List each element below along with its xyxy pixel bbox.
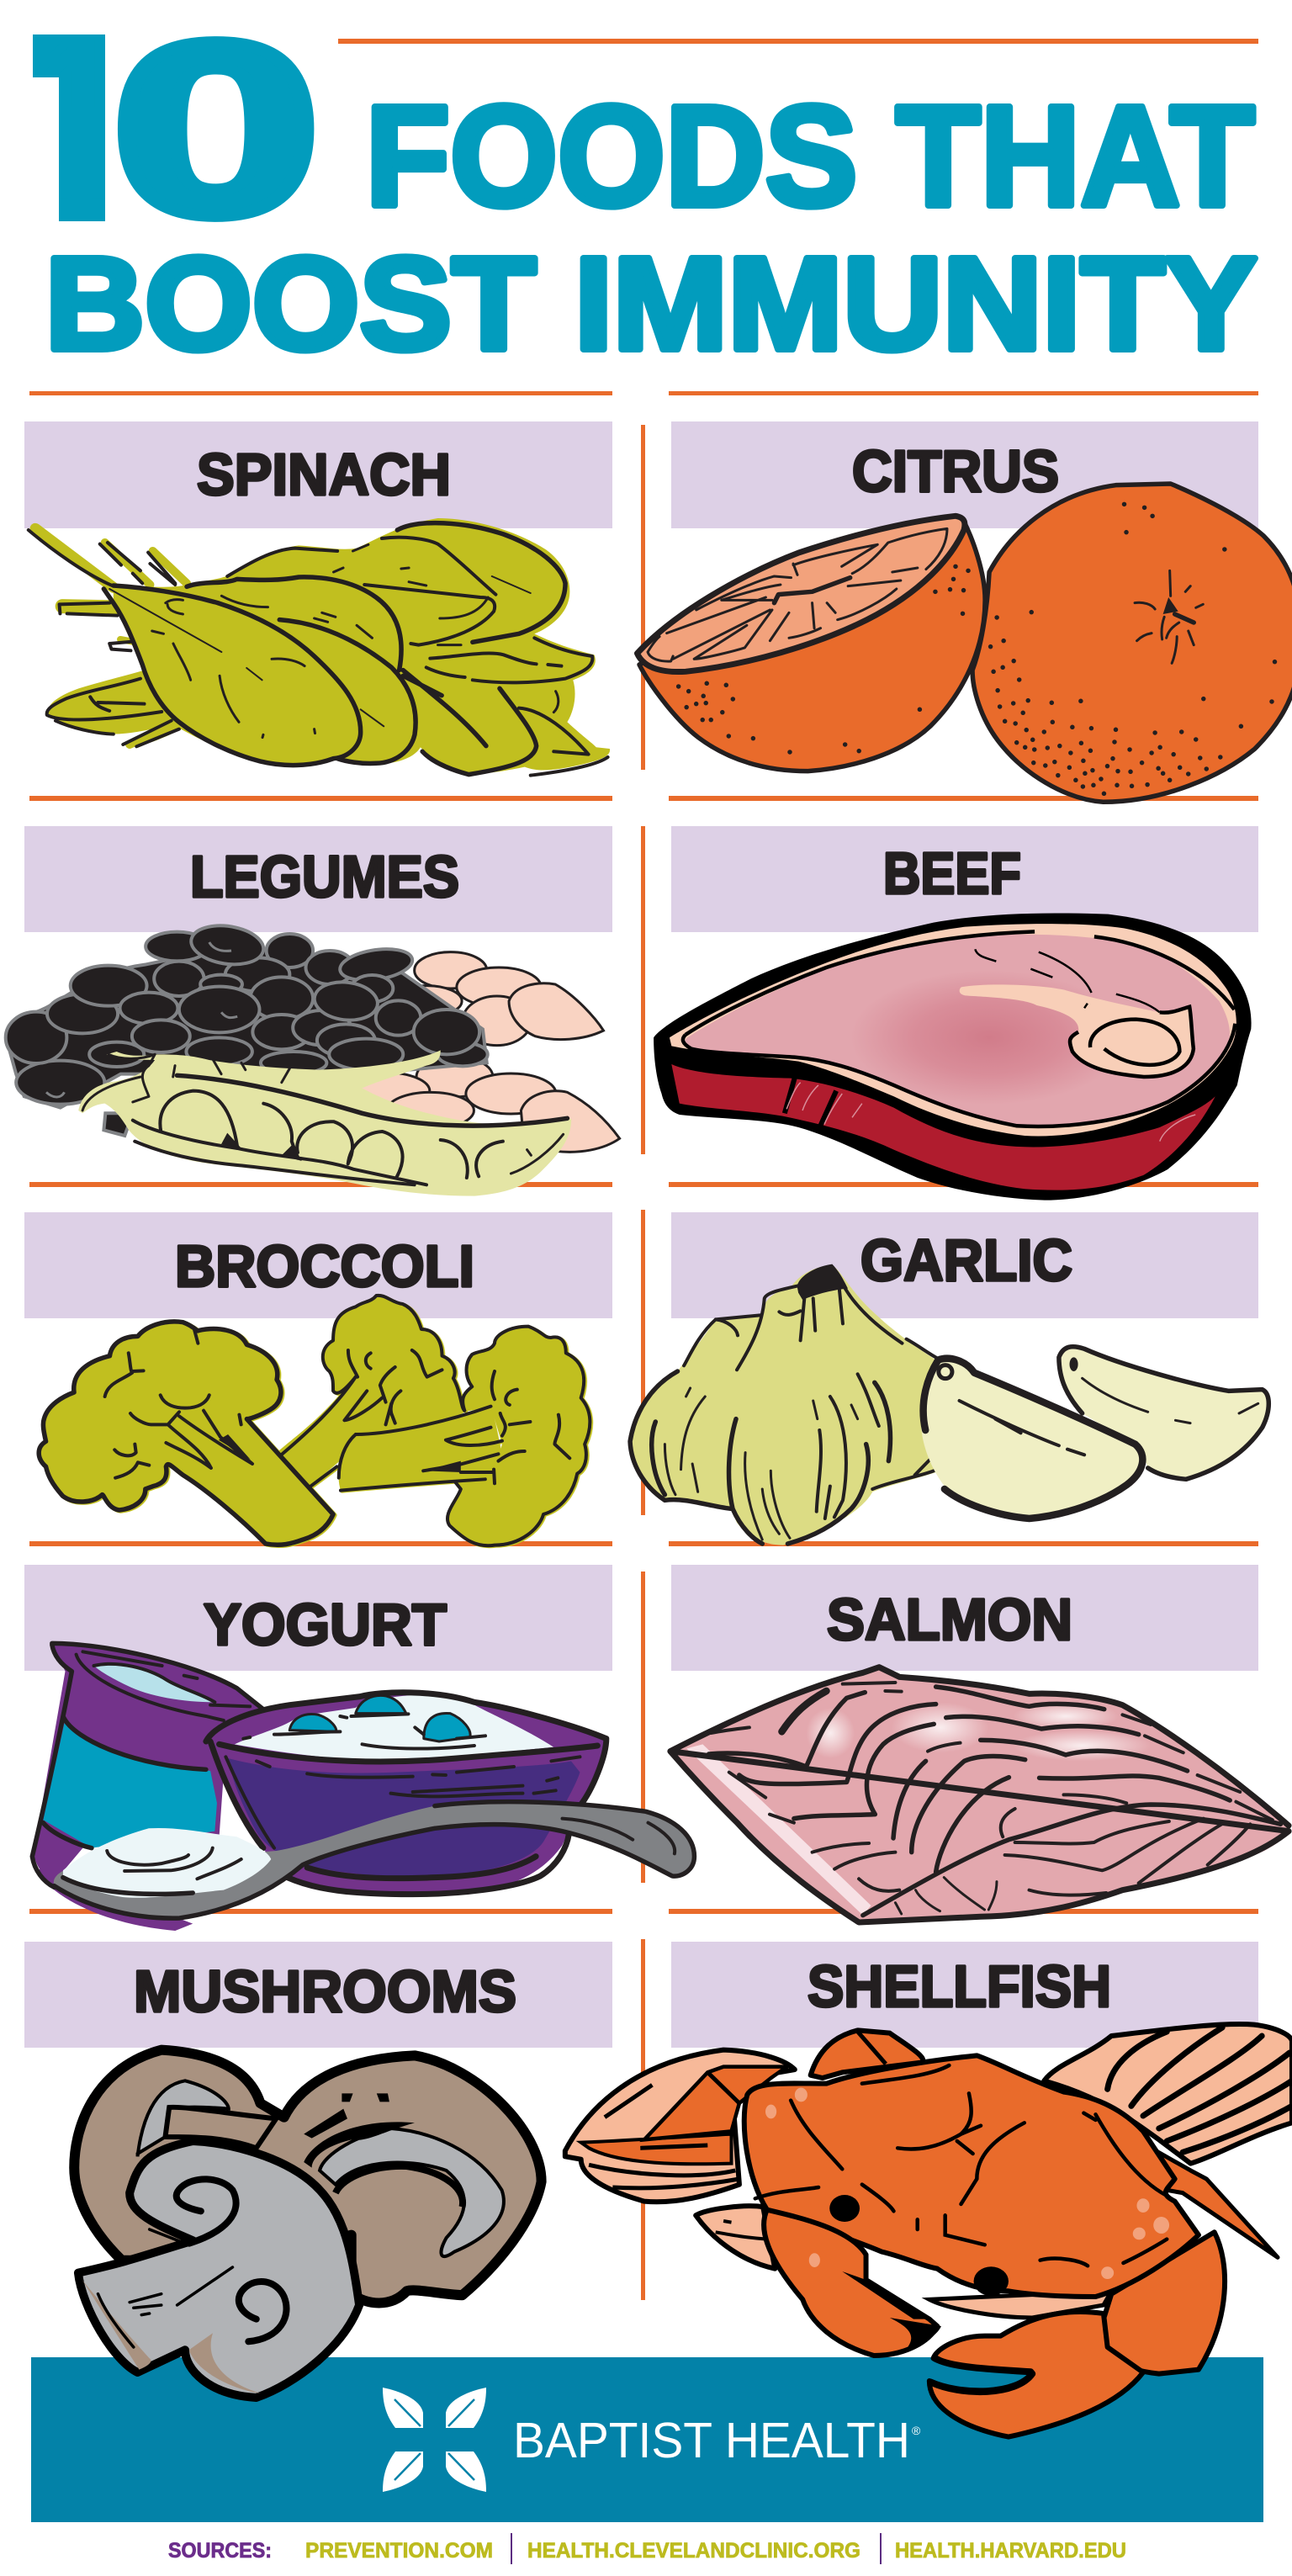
- sources line: HEALTH.HARVARD.EDU: [895, 2539, 1126, 2563]
- panel: beef: BEEF: [883, 840, 1021, 906]
- left floret: [39, 1322, 333, 1545]
- illustration: yogurt cup, bowl and spoon: [32, 1643, 694, 1931]
- black beans: [6, 920, 488, 1136]
- small stem behind: [343, 2238, 400, 2303]
- illustration: broccoli florets: [39, 1296, 590, 1545]
- title: BOOST IMMUNITY: [45, 231, 1258, 378]
- footer logo: Baptist Health: [383, 2388, 921, 2492]
- title: FOODS THAT: [365, 77, 1255, 236]
- panel: citrus: [638, 421, 1292, 802]
- bowl: [206, 1693, 606, 1895]
- illustration: mushrooms: [74, 2050, 542, 2398]
- panel: salmon: SALMON: [827, 1587, 1072, 1652]
- illustration: salmon fillet: [670, 1667, 1289, 1922]
- panel: shellfish: [565, 1942, 1292, 2437]
- panel: yogurt: [24, 1565, 694, 1931]
- panel: legumes: LEGUMES: [190, 844, 459, 909]
- icon: four leaf mark: [383, 2388, 486, 2492]
- back mushrooms: [74, 2050, 542, 2303]
- panel: legumes: [6, 826, 620, 1196]
- panel: salmon: [670, 1565, 1289, 1922]
- illustration: oranges: [638, 484, 1292, 802]
- panel: mushrooms: MUSHROOMS: [134, 1959, 516, 2024]
- panel: shellfish: SHELLFISH: [808, 1953, 1111, 2019]
- front mushroom: [78, 2141, 359, 2398]
- clams: [565, 2024, 1292, 2269]
- footer band: [31, 2357, 1263, 2522]
- panel: garlic: [629, 1212, 1268, 1545]
- title: [33, 34, 1258, 353]
- illustration: beans, almonds and pea pod: [6, 920, 620, 1196]
- back clove: [1059, 1347, 1268, 1479]
- sources line: HEALTH.CLEVELANDCLINIC.ORG: [527, 2539, 860, 2563]
- red side: [671, 1064, 1215, 1190]
- sources line: [168, 2533, 1126, 2564]
- panel: beef: [654, 826, 1258, 1201]
- crab: [744, 2030, 1278, 2437]
- front clove: [921, 1360, 1143, 1519]
- pea pod: [78, 1050, 571, 1196]
- panel: broccoli: BROCCOLI: [175, 1233, 474, 1299]
- yogurt cup: [34, 1868, 193, 1931]
- sources line: PREVENTION.COM: [305, 2539, 493, 2563]
- blueberries: [289, 1695, 470, 1741]
- panel: spinach: SPINACH: [197, 442, 451, 507]
- wordmark: BAPTIST HEALTH: [513, 2413, 910, 2468]
- spoon: [54, 1802, 694, 1918]
- panel: spinach: [24, 421, 612, 776]
- lean meat: [686, 935, 1230, 1125]
- illustration: garlic bulb and cloves: [629, 1264, 1268, 1545]
- illustration: steak: [654, 913, 1252, 1201]
- middle floret: [277, 1374, 386, 1487]
- fat: [670, 924, 1236, 1136]
- bone: [960, 984, 1194, 1077]
- panel: citrus: CITRUS: [852, 438, 1059, 504]
- sources line: SOURCES:: [168, 2539, 272, 2563]
- right floret: [447, 1327, 590, 1545]
- panel: mushrooms: [24, 1942, 612, 2398]
- panel: yogurt: YOGURT: [204, 1592, 447, 1657]
- panel: garlic: GARLIC: [860, 1227, 1072, 1293]
- panel: broccoli: [24, 1212, 612, 1545]
- registered mark: ®: [912, 2424, 921, 2437]
- illustration: spinach leaves: [29, 518, 610, 776]
- almonds: [273, 952, 620, 1152]
- illustration: crab and clams: [565, 2024, 1292, 2437]
